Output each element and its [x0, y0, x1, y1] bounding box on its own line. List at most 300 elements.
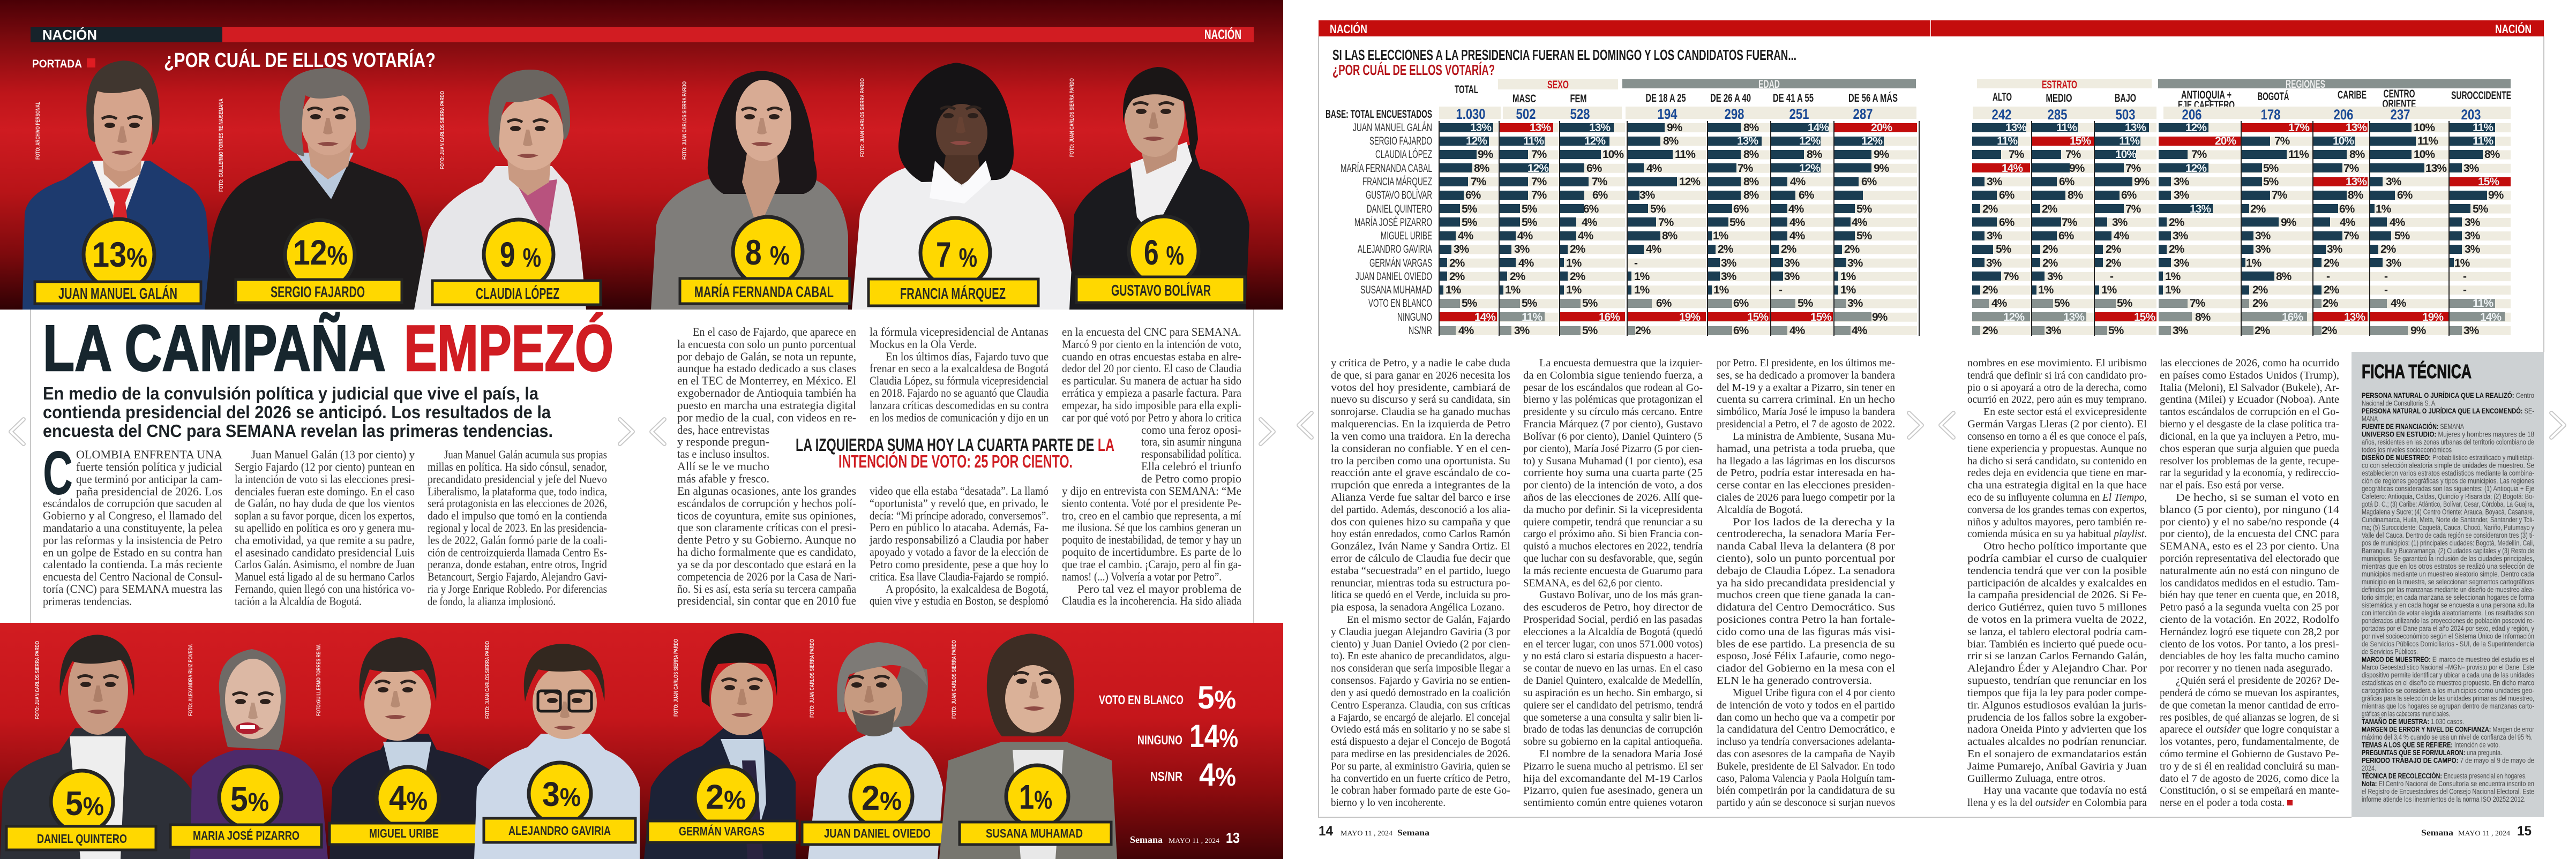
page 13 header bar: NACIÓN — [42, 27, 97, 43]
table column: Bogotá — [2241, 122, 2312, 337]
table column: Centro Oriente: 3% — [2386, 176, 2402, 188]
table column: Bogotá: 3% — [2255, 230, 2271, 242]
body text column 2 — [235, 448, 415, 608]
page 14 body column 1: del partido. Además, desconoció a los alia- — [1331, 504, 1510, 516]
body text column 6: me ilusiona. Sé que los cambios generan un — [1062, 521, 1241, 534]
page 15 body column 1: nadora Oneida Pinto y advierten que los — [1967, 724, 2147, 735]
table column: fem: 4% — [1578, 230, 1594, 242]
page 15 body column 2: cómo termine el Gobierno de Gustavo Pe- — [2160, 749, 2339, 760]
name label: Claudia López — [432, 281, 601, 305]
page 14 body column 2: pesar de los escándalos que rodean al Go- — [1523, 382, 1703, 394]
table column: total: 6% — [1465, 189, 1481, 201]
panel: ficha técnica — [2352, 352, 2544, 817]
page 14 body column 1: estaba “secuestrada” en el partido, luego — [1331, 566, 1510, 577]
candidate: Susana Muhamad — [939, 634, 1117, 859]
table column: 26 to 40: 3% — [1721, 257, 1737, 269]
page 15 body column 2: bierno y el desgaste de la clase política tra- — [2160, 419, 2339, 430]
body text column 5: apoyado y votado a favor de la elección de — [870, 545, 1049, 559]
candidate names column: NS/NR — [1409, 325, 1432, 337]
ficha técnica text: Nota: El Centro Nacional de Consultoría se encuentra inscrito en — [2362, 780, 2534, 788]
candidate: Juan Daniel Oviedo — [802, 642, 953, 859]
table column: total: 3% — [1454, 243, 1470, 255]
page 14 body column 1: le cobran haber formado parte de este Go- — [1331, 785, 1510, 796]
table column: Suroccidente: 9% — [2488, 189, 2504, 201]
page 15 body column 1: ha dicho si será candidato, su contenido en — [1967, 456, 2147, 467]
name label: Miguel Uribe — [330, 823, 480, 845]
portrait: Quintero — [0, 635, 197, 859]
candidate: Germán Vargas — [644, 633, 797, 859]
page 15 body column 2: dicional, en la que ya incluyen a Petro, mu- — [2160, 431, 2339, 442]
page 15 footer: Semana — [2421, 828, 2453, 838]
table column: fem: 5% — [1582, 325, 1598, 337]
name label: Susana Muhamad — [960, 822, 1111, 845]
badge: 9%: 9 % — [500, 235, 541, 274]
ficha técnica text: pos de municipios: (1) principales ciudades: Bogotá, Medellín, Cali, — [2362, 539, 2534, 547]
page 14-15 header bar — [1319, 20, 2544, 36]
ficha técnica text: municipios. Se garantizó la inclusión de las ciudades principales, — [2362, 555, 2534, 562]
photo credits: bottom row: FOTO: ALEXANDRA RUIZ POVEDA — [188, 644, 194, 716]
page 14 body column 3: ya ha sido precandidata presidencial y — [1717, 578, 1895, 589]
body text column 5: frenar en seco a la exalcaldesa de Bogotá — [870, 361, 1049, 375]
candidate names column: SERGIO FAJARDO — [1369, 135, 1432, 147]
table column: Suroccidente: - — [2463, 270, 2467, 283]
ficha técnica text: informe atiende los lineamientos de la norma ISO 20252:2012. — [2362, 795, 2526, 803]
table column headers: DE 18 A 25 — [1646, 92, 1686, 104]
photo credits: bottom row — [34, 639, 957, 719]
page 14 body column 3: La ministra de Ambiente, Susana Mu- — [1733, 431, 1895, 442]
chart title — [1332, 47, 1796, 78]
page 14 body column 1: y crítica de Petro, y a nadie le cabe duda — [1331, 358, 1510, 369]
page 14 body column 2: da mucho por definir. Si la vicepresidenta — [1523, 504, 1703, 516]
table column: estrato alto: 6% — [1999, 216, 2015, 229]
page 14 body column 2: por ciento), María José Pizarro (5 por cien- — [1523, 443, 1703, 455]
table column: Suroccidente: 3% — [2465, 230, 2481, 242]
body text column 4: ha dicho formalmente que es candidato, — [677, 545, 856, 559]
table column: fem: 7% — [1592, 176, 1608, 188]
table column: Antioquia + Eje Cafetero: 12% — [2185, 162, 2207, 175]
ficha técnica text: de Servicios Públicos. — [2362, 648, 2418, 655]
page 14 body column 1: rrupción que enreda a integrantes de la — [1331, 480, 1510, 491]
photo credits: bottom row: FOTO: JUAN CARLOS SIERRA PARDO — [34, 641, 41, 719]
table column headers: ANTIOQUIA + — [2181, 89, 2231, 101]
candidate: Miguel Uribe — [330, 637, 498, 859]
page 14 body column 3: centroderecha, la senadora María Fer- — [1717, 529, 1895, 540]
chart title: SI LAS ELECCIONES A LA PRESIDENCIA FUERAN EL DOMINGO Y LOS CANDIDATOS FUERAN... — [1332, 47, 1796, 63]
ficha técnica text: ción de regiones geográficas y tipos de municipios. Las regiones — [2362, 477, 2534, 485]
page 14 body column 3 — [1717, 358, 1896, 809]
page 14 body column 2: des escuderos de Petro, hoy director de — [1523, 602, 1703, 613]
body text column 4: des, hace entrevistas — [677, 423, 769, 436]
table column headers: ORIENTE — [2382, 98, 2416, 110]
page 15 body column 2: De hecho, si se suman el voto en — [2176, 492, 2339, 503]
table column: Bogotá: 2% — [2250, 203, 2266, 215]
body text column 4: aunque ha estado dedicado a sus clases — [677, 361, 856, 375]
page 14 body column 1: hoy están enredados, como Carlos Ramón — [1331, 529, 1510, 540]
body text column 6 — [1062, 325, 1241, 607]
table column: estrato medio: 1% — [2038, 284, 2054, 296]
base row: total respondents: 1.030 — [1456, 106, 1485, 122]
body text column 2: Juan Manuel Galán (13 por ciento) y — [251, 448, 415, 461]
name label: Gustavo Bolívar: GUSTAVO BOLÍVAR — [1111, 281, 1211, 299]
table column: estrato alto — [1972, 122, 2031, 337]
page 15 body column 1: la campaña presidencial de 2026. Si Fe- — [1967, 590, 2147, 601]
ficha técnica text: años, residentes en las zonas urbanas del territorio colombiano de — [2362, 438, 2534, 446]
page 13 footer — [1130, 830, 1240, 846]
badge: 3%: 3% — [542, 775, 581, 813]
badge: 1% — [1006, 765, 1068, 827]
table column: Antioquia + Eje Cafetero: 3% — [2174, 189, 2190, 201]
table column: estrato bajo: 13% — [2125, 122, 2146, 134]
page 15 body column 1: Germán Vargas Lleras (2 por ciento). El — [1967, 419, 2147, 430]
page 14 body column 3: ses, se ha dedicado a promover la bandera — [1717, 370, 1895, 381]
page 15 body column 2: bién hay que tener en cuenta que, en 2018, — [2160, 590, 2339, 601]
table column: estrato bajo — [2095, 122, 2156, 337]
ficha técnica text: dispositivo permite identificar y ubicar a cada una de las unidades — [2362, 671, 2534, 679]
page 15 body column 2: ¿Quién será el presidente de 2026? De- — [2176, 675, 2339, 687]
page 14 body column 3: del M-19 y a exaltar a Pizarro, sin tener en — [1717, 382, 1895, 394]
page 14 footer: 14 — [1319, 824, 1333, 839]
candidate: Sergio Fajardo — [205, 68, 429, 310]
page 14 body column 1: está dispuesto a dejar el Concejo de Bogotá — [1331, 736, 1510, 748]
name label: Juan Manuel Galán: JUAN MANUEL GALÁN — [58, 284, 177, 303]
page 15 body column 1: En el sonajero de exmandatarios están — [1967, 749, 2147, 760]
table column: 56 and over: 4% — [1852, 325, 1868, 337]
ficha técnica text: MARGEN DE ERROR Y NIVEL DE CONFIANZA: Margen de error — [2362, 725, 2534, 734]
table column: total: 2% — [1449, 257, 1465, 269]
page 13 footer: 13 — [1226, 830, 1240, 846]
badge: 6% — [1129, 216, 1199, 286]
table column: fem — [1560, 122, 1625, 337]
table column: estrato alto: 14% — [2002, 162, 2023, 175]
body text column 3: ción de centroizquierda llamada Centro Es- — [428, 546, 607, 559]
ficha técnica text: TEMAS A LOS QUE SE REFIERE: Intención de voto. — [2362, 741, 2500, 749]
table column: estrato alto: 3% — [1986, 257, 2002, 269]
portrait: Bolívar — [1069, 67, 1249, 310]
page 14 body column 3: presidencial a Petro, el 7 de agosto de 2022. — [1717, 419, 1895, 430]
page 15 body column 1 — [1967, 358, 2147, 809]
page 15 body column 1: comienda música en su ya habitual playlist. — [1967, 529, 2147, 540]
badge: 5%: 5% — [230, 780, 269, 818]
page 15 body column 1: tiene experiencia y propuestas. Aunque no — [1967, 443, 2147, 455]
table column: fem: 2% — [1570, 243, 1586, 255]
page 14 body column 2 — [1523, 358, 1703, 809]
table column: 18 to 25: 8% — [1663, 135, 1679, 147]
table column: total: 7% — [1471, 176, 1487, 188]
body text column 6: tora, sin asumir ninguna — [1141, 435, 1241, 448]
table column: Antioquia + Eje Cafetero: 7% — [2191, 148, 2207, 161]
page 15 body column 1: nombres en ese movimiento. El uribismo — [1967, 358, 2147, 369]
table column: masc: 2% — [1510, 270, 1526, 283]
page 14 body column 2: Pizarro, quien fue asesinado, genera un — [1523, 785, 1703, 796]
page 15 body column 2: los candidatos medidos en el estudio. Tam- — [2160, 578, 2339, 589]
ficha técnica text: FUENTE DE FINANCIACIÓN: SEMANA — [2362, 423, 2464, 431]
base row: total respondents: 206 — [2182, 107, 2202, 123]
table column: estrato bajo: - — [2110, 270, 2114, 283]
ficha técnica text: mientras que en los otros estratos se realizó una selección de — [2362, 562, 2534, 570]
table column: estrato alto: 4% — [1991, 297, 2008, 310]
page 14 body column 1: tro la perciben como una oportunista. Su — [1331, 456, 1510, 467]
candidate: Gustavo Bolívar — [1069, 67, 1249, 310]
table column: masc: 3% — [1514, 325, 1530, 337]
page 13 side rules — [31, 310, 1254, 623]
ficha técnica text: Nacional de Consultoría S. A. — [2362, 400, 2437, 407]
table column: estrato alto: 2% — [1982, 203, 1998, 215]
badge: 1%: 1% — [1019, 778, 1052, 816]
panel: bottom red band — [0, 623, 1283, 859]
table column: estrato medio: 11% — [2056, 122, 2077, 134]
page 14 body column 3: Alcaldía de Bogotá. — [1717, 504, 1803, 516]
body text column 6: poquito de incertidumbre. Es parte de lo — [1062, 545, 1241, 559]
page 14 body column 1: lítica se quedó en el Verde, incluida su pro- — [1331, 590, 1510, 601]
name label: Gustavo Bolívar — [1076, 277, 1245, 303]
table column: Centro Oriente: 10% — [2414, 122, 2435, 134]
table column: Antioquia + Eje Cafetero: 1% — [2165, 284, 2181, 296]
table column: 41 to 55: 12% — [1799, 135, 1821, 147]
page 14 body column 2: bierno y las polémicas que protagonizan el — [1523, 394, 1703, 405]
page 15 body column 2: en países como Estados Unidos (Trump), — [2160, 370, 2339, 381]
table column: 18 to 25: 6% — [1656, 297, 1672, 310]
table column: estrato alto: 7% — [2009, 148, 2025, 161]
table column headers: DE 56 A MÁS — [1848, 92, 1898, 104]
table column: Antioquia + Eje Cafetero — [2159, 122, 2241, 337]
table column: estrato alto: 13% — [2005, 122, 2027, 134]
table column headers: BOGOTÁ — [2258, 91, 2289, 103]
table column: fem: 6% — [1586, 162, 1602, 175]
table column: Caribe: 6% — [2339, 203, 2355, 215]
table column: 56 and over: 20% — [1871, 122, 1892, 134]
table column: 26 to 40: 8% — [1743, 189, 1759, 201]
page 14 body column 2: El nombre de la senadora María José — [1539, 749, 1703, 760]
base row: total respondents — [1326, 106, 2511, 123]
page 14 body column 2: hija del excomandante del M-19 Carlos — [1523, 773, 1703, 785]
candidate names column: FRANCIA MÁRQUEZ — [1362, 176, 1432, 188]
candidate names column: JUAN MANUEL GALÁN — [1353, 122, 1432, 134]
page 15 body column 2: Constitución, o si se empeñará en mante- — [2160, 785, 2339, 796]
page 14 body column 3: incluso ya tendría conversaciones adelanta- — [1717, 736, 1895, 748]
table column: 41 to 55: 3% — [1784, 257, 1800, 269]
table column: Caribe: 2% — [2323, 297, 2339, 310]
table column: Antioquia + Eje Cafetero: 2% — [2169, 216, 2185, 229]
table column: estrato medio: 13% — [2063, 311, 2085, 323]
page 14 body column 1: consensos. Fajardo y Gaviria no se entien- — [1331, 675, 1510, 687]
page 14 body column 2: presidente y su círculo más cercano. Entre — [1523, 406, 1703, 418]
table column: estrato bajo: 11% — [2119, 135, 2140, 147]
ficha técnica text: torio simple; en cada manzana se seleccionan hogares de forma — [2362, 593, 2534, 601]
other results: blank, none, no answer: NINGUNO — [1137, 733, 1182, 748]
table column: fem: 16% — [1599, 311, 1620, 323]
table column: Antioquia + Eje Cafetero: 20% — [2215, 135, 2236, 147]
name label: María Fernanda Cabal: MARÍA FERNANDA CABAL — [694, 283, 834, 301]
page 14 body column 2: Bolívar (6 por ciento), Daniel Quintero (5 — [1523, 431, 1703, 442]
portrait: Pizarro — [190, 649, 328, 859]
table column: Bogotá: 5% — [2263, 162, 2279, 175]
table column: Centro Oriente: 13% — [2425, 162, 2447, 175]
page 15 body column 1: se lanza, el tablero electoral podría cam- — [1967, 627, 2147, 638]
body text column 1 — [43, 448, 222, 608]
table column: 18 to 25: 7% — [1658, 216, 1674, 229]
table column headers: FEM — [1570, 93, 1587, 105]
photo credits: bottom row: FOTO: JUAN CARLOS SIERRA PARDO — [484, 641, 491, 719]
standfirst: contienda presidencial del 2026 se anticipó. Los resultados de la — [43, 402, 551, 422]
body text column 5: en 2018. Fajardo no se aguantó que Claudia — [870, 386, 1049, 400]
page 13 footer: Semana — [1130, 834, 1163, 845]
body text column 6: dedor del 20 por ciento. El caso de Claudia — [1062, 361, 1241, 375]
ficha técnica text: PREGUNTAS QUE SE FORMULARON: una pregunta. — [2362, 749, 2502, 757]
table column: estrato bajo: 6% — [2121, 189, 2137, 201]
ficha técnica text: PERSONA NATURAL O JURÍDICA QUE LA REALIZÓ: Centro — [2362, 391, 2534, 400]
page 14 body column 3: ciales de 2026 para luego competir por la — [1717, 492, 1895, 503]
table column: 18 to 25: 11% — [1675, 148, 1696, 161]
page 14 body column 3: dan como un hecho que va a competir por — [1717, 712, 1896, 724]
table column: estrato medio: 3% — [2047, 270, 2063, 283]
body text column 1: Gobierno y al Congreso, el llamado del — [43, 509, 222, 522]
table column: Centro Oriente: - — [2384, 284, 2388, 296]
page 14 body column 1: to). En este abanico de precandidatos, algu- — [1331, 651, 1510, 662]
page 14 body column 1: nos consideran que sería imposible llegar a — [1331, 663, 1510, 674]
page 15 body column 1: participación de alcaldes y exalcaldes en — [1967, 578, 2147, 589]
body text column 1: primeras tendencias. — [43, 594, 132, 608]
table column: Suroccidente: 8% — [2484, 148, 2500, 161]
body text column 4: tas e incluso insultos. — [677, 447, 769, 461]
badge: 12%: 12% — [293, 232, 348, 272]
table column: Bogotá: 11% — [2288, 148, 2309, 161]
ficha técnica text: sistemática y en cada hogar se encuesta a una persona adulta — [2362, 601, 2534, 609]
ficha técnica text: PERIODO TRABAJO DE CAMPO: 7 de mayo al 9 de mayo de — [2362, 756, 2534, 765]
body text column 3: de fondo, la alianza implosionó. — [428, 594, 556, 608]
table column: estrato bajo: 9% — [2134, 176, 2150, 188]
page 15 body column 2: ciento de los votos. Por tanto, a los presi- — [2160, 639, 2339, 650]
body text column 5: jardo responsabilizó a Claudia por haber — [869, 533, 1049, 546]
page 15 body column 2: blanco (5 por ciento), por ninguno (14 — [2160, 504, 2339, 516]
table column: Caribe: 7% — [2343, 230, 2360, 242]
table column: estrato medio: 7% — [2065, 148, 2081, 161]
table column: 41 to 55: 5% — [1798, 297, 1814, 310]
table column: 18 to 25: 19% — [1679, 311, 1701, 323]
name label: Germán Vargas — [648, 821, 797, 842]
table column: 26 to 40: 6% — [1733, 297, 1749, 310]
table column: Centro Oriente: - — [2384, 270, 2388, 283]
candidate names column: DANIEL QUINTERO — [1367, 203, 1432, 215]
body text column 4: Allí se le ve mucho — [677, 459, 769, 473]
page 14 body column 1: den y así quedó demostrado en la coalición — [1331, 688, 1510, 699]
page 15 body column 2: por ciento) y el no sabe/no responde (4 — [2160, 517, 2339, 528]
badge: 4%: 4% — [389, 779, 428, 817]
table column: 18 to 25: 8% — [1662, 230, 1678, 242]
page 15 body column 1: pio o si apoyará a otro de la derecha, como — [1967, 382, 2147, 394]
page 13 footer: MAYO 11 , 2024 — [1169, 837, 1220, 845]
body text column 4: exgobernador de Antioquia también ha — [677, 386, 856, 400]
table column: total: 14% — [1474, 311, 1496, 323]
table column: Centro Oriente: 3% — [2386, 257, 2402, 269]
candidate: Juan Manuel Galán — [23, 61, 213, 310]
table column: Centro Oriente: 10% — [2414, 148, 2435, 161]
body text column 3: precandidato presidencial y jefe del Nuevo — [428, 472, 607, 486]
name label: Sergio Fajardo — [236, 280, 402, 303]
page 14 body column 1: renunciar, mientras toda su estructura po- — [1331, 578, 1510, 589]
table column: 18 to 25: 1% — [1634, 270, 1650, 283]
candidate names column: GERMÁN VARGAS — [1369, 257, 1432, 269]
page 15 body column 1: conversa de los grandes temas con expertos, — [1967, 504, 2147, 516]
table column: total: 5% — [1462, 216, 1478, 229]
page 14 body column 2: corriente hoy suma una cuarta parte (25 — [1523, 468, 1703, 479]
table column separators — [1439, 121, 2449, 336]
other results: blank, none, no answer: 4% — [1199, 757, 1236, 793]
table column headers: SUROCCIDENTE — [2451, 89, 2511, 102]
table column headers: BAJO — [2115, 92, 2136, 104]
table column: estrato bajo: 2% — [2106, 243, 2122, 255]
table column: Bogotá: 1% — [2246, 257, 2262, 269]
table column: total: 13% — [1470, 122, 1492, 134]
body text column 4: que son claramente críticas con el presi- — [677, 521, 856, 534]
page 15 body column 1: redes deja en evidencia que tiene en mar- — [1967, 468, 2147, 479]
page 15 body column 2: nerse en el poder a toda costa. — [2160, 797, 2285, 809]
table column: Suroccidente: 1% — [2454, 257, 2470, 269]
page 14 body column 2: brado de todas las denuncias de corrupción — [1523, 724, 1703, 735]
body text column 6: siento contenta. Voté por el presidente Pe- — [1062, 496, 1241, 510]
table column: 41 to 55: 4% — [1789, 230, 1806, 242]
table column: Caribe: 2% — [2324, 284, 2340, 296]
table column: 41 to 55: 4% — [1790, 176, 1806, 188]
ficha técnica text: municipio en la muestra, se seleccionan segmentos cartográficos — [2362, 578, 2534, 586]
page 14 body column 3: didatura del Centro Democrático. Sus — [1717, 602, 1895, 613]
table column: estrato medio — [2032, 122, 2094, 337]
table column: estrato alto: 3% — [1987, 176, 2003, 188]
body text column 3: Betancourt, Sergio Fajardo, Alejandro Gavi- — [428, 570, 607, 583]
page 15 body column 1: Jaime Pumarejo, Aníbal Gaviria y Juan — [1967, 761, 2147, 772]
body text column 3: será protagonista en las elecciones de 2026, — [428, 496, 607, 510]
page 14 body column 3: nanda Cabal lleva la delantera (8 por — [1717, 541, 1896, 552]
body text column 3: les de 2022, Galán formó parte de la coali- — [428, 533, 607, 547]
page 14 body column 3: posiciones contra Petro la han fortale- — [1717, 614, 1895, 626]
table column: masc: 12% — [1527, 162, 1549, 175]
body text column 6: responsabilidad política. — [1141, 447, 1241, 461]
body text column 5: Petro como presidente, pese a que hoy lo — [870, 557, 1049, 571]
body text column 2: denciales fueran este domingo. En el caso — [235, 485, 415, 498]
table column: Antioquia + Eje Cafetero: 3% — [2174, 176, 2190, 188]
headline: La campaña empezó: EMPEZÓ — [404, 312, 613, 385]
ficha técnica text: ma; (5) Suroccidente: Caquetá, Cauca, Chocó, Nariño, Putumayo y — [2362, 524, 2534, 531]
drop cap: C — [43, 438, 73, 508]
page 14 body column 1: bierno y lo ven incoherente. — [1331, 797, 1446, 809]
table column: total: 12% — [1466, 135, 1487, 147]
page 15 body column 1: tir. Algunos estudiosos evalúan la juris- — [1967, 700, 2147, 711]
table column: Suroccidente: - — [2463, 284, 2467, 296]
page 14 body column 3: Bukele, presidente de El Salvador. En todo — [1717, 761, 1895, 772]
page 15 body column 1: actuales alcaldes no podrían renunciar. — [1967, 736, 2147, 748]
ficha técnica text: co con selección aleatoria simple de unidades de muestreo. Se — [2362, 462, 2534, 469]
body text column 4: la encuesta con solo un punto porcentual — [677, 337, 856, 351]
page 14 body column 1: Alianza Verde fue saltar del barco e irse — [1331, 492, 1510, 503]
photo credits: top row: FOTO: JUAN CARLOS SIERRA PARDO — [1069, 78, 1075, 157]
table column: 56 and over: 9% — [1872, 311, 1888, 323]
body text column 5: en los medios de comunicación y dijo en un — [870, 411, 1049, 424]
table column headers: CARIBE — [2338, 89, 2367, 101]
body text column 6: Marcó 9 por ciento en la intención de voto, — [1062, 337, 1241, 351]
body text column 6: es particular. Su manera de actuar ha sido — [1062, 374, 1241, 387]
table column: 18 to 25: 3% — [1639, 189, 1656, 201]
table column: fem: 12% — [1584, 135, 1606, 147]
table column: 18 to 25: 12% — [1679, 176, 1701, 188]
table column: Bogotá: 8% — [2276, 270, 2292, 283]
table column: 56 and over: 1% — [1840, 270, 1856, 283]
table column: masc: 5% — [1522, 216, 1538, 229]
table column: Bogotá: 2% — [2252, 284, 2268, 296]
candidate names column — [1341, 122, 1432, 337]
badge: 8%: 8 % — [745, 232, 790, 272]
table column: fem: 4% — [1582, 216, 1598, 229]
portrait: Muhamad — [939, 634, 1117, 859]
body text column 6: Ella celebró el triunfo — [1141, 459, 1241, 473]
